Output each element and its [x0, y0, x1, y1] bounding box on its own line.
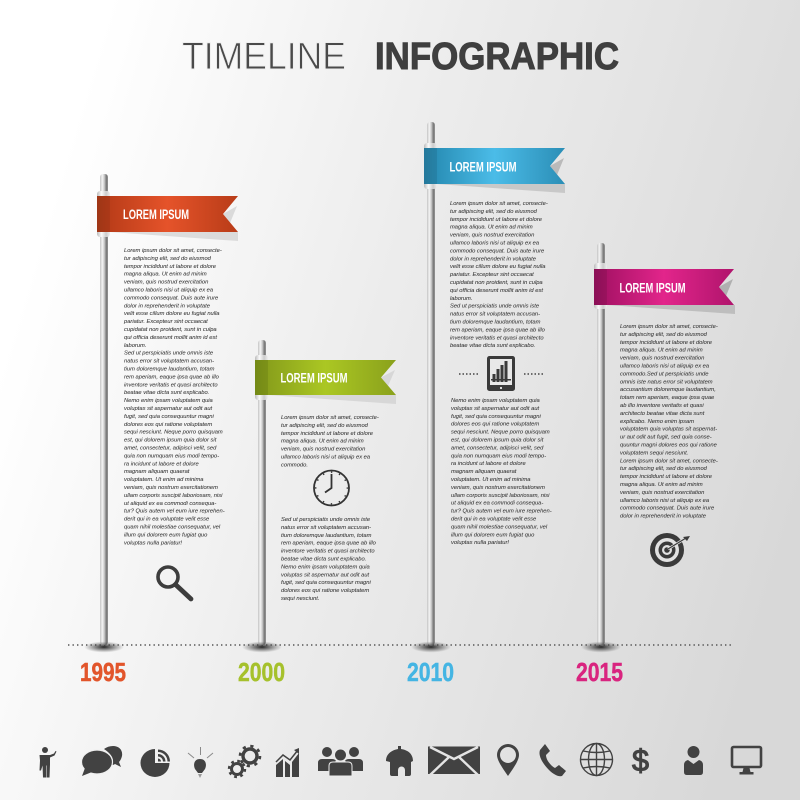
- text block 2010 part one: qui officia deserunt mollit anim id est: [450, 288, 543, 294]
- text block 2000 part two: beatae vitae dicta sunt explicabo.: [281, 556, 366, 562]
- icon: user: [684, 746, 703, 775]
- text block 1995: magnam aliquam quaerat: [124, 469, 190, 475]
- icon: light bulb: [188, 747, 213, 778]
- text block 2010 part two: quam nihil molestiae consequatur, vel: [451, 524, 548, 530]
- panel: 2010: [407, 122, 565, 687]
- text block 2010 part two: sequi nesciunt. Neque porro quisquam: [451, 430, 550, 436]
- icon: presenter: [40, 747, 56, 778]
- flag 1995: [97, 196, 238, 241]
- pole 2015: [581, 243, 621, 652]
- text block 2000 part two: inventore veritatis et quasi architecto: [281, 549, 375, 555]
- icon: speech bubbles: [82, 746, 122, 776]
- text block 1995: ullam corporis suscipit laboriosam, nisi: [124, 493, 223, 499]
- text block 2010 part one: velit esse cillum dolore eu fugiat nulla: [450, 264, 546, 270]
- text block 2000 part one: tur adipiscing elit, sed do eiusmod: [281, 423, 369, 429]
- pole 2010: [411, 122, 451, 652]
- text block 2010 part one: tium doloremque laudantium, totam: [450, 320, 541, 326]
- icon: pie with signal: [140, 749, 170, 777]
- flag 2015: [594, 269, 735, 314]
- icon: magnifier: [158, 567, 191, 599]
- text block 2010 part one: Sed ut perspiciatis unde omnis iste: [450, 304, 539, 310]
- icon: telephone: [539, 744, 566, 776]
- panel: 2000: [238, 340, 396, 687]
- text block 2015: tempor incididunt ut labore et dolore: [620, 474, 712, 480]
- icon: envelope: [428, 746, 480, 776]
- text block 2010 part two: voluptatem. Ut enim ad minima: [451, 477, 531, 483]
- text block 1995: velit esse cillum dolore eu fugiat nulla: [124, 311, 220, 317]
- text block 2015: commodo.Sed ut perspiciatis unde: [620, 371, 708, 377]
- flag 2000: LOREM IPSUM: [280, 370, 348, 386]
- text block 1995: quam nihil molestiae consequatur, vel: [124, 524, 221, 530]
- text block 2015: architecto beatae vitae dicta sunt: [620, 411, 705, 417]
- text block 2015: magna aliqua. Ut enim ad minim: [620, 482, 703, 488]
- year 2015: 2015: [576, 657, 623, 687]
- text block 1995: tur adipiscing elit, sed do eiusmod: [124, 256, 212, 262]
- text block 2010 part one: laborum.: [450, 296, 472, 302]
- text block 1995: laborum.: [124, 343, 146, 349]
- text block 1995: dolores eos qui ratione voluptatem: [124, 422, 212, 428]
- flag 2015: LOREM IPSUM: [620, 280, 686, 296]
- text block 2000 part two: Nemo enim ipsam voluptatem quia: [281, 564, 371, 570]
- text block 1995: tur? Quis autem vel eum iure reprehen-: [124, 509, 225, 515]
- text block 1995: ut aliquid ex ea commodi consequa-: [124, 501, 216, 507]
- text block 2010 part two: quia non numquam eius modi tempo-: [451, 453, 546, 459]
- text block 2010 part one: commodo consequat. Duis aute irure: [450, 248, 544, 254]
- text block 1995: commodo consequat. Duis aute irure: [124, 295, 218, 301]
- text block 2010 part one: rem aperiam, eaque ipsa quae ab illo: [450, 327, 546, 333]
- text block 2015: ab illo inventore veritatis et quasi: [620, 403, 704, 409]
- panel: 2015: [576, 243, 735, 687]
- text block 1995: Sed ut perspiciatis unde omnis iste: [124, 351, 213, 357]
- text block 2010 part one: Lorem ipsum dolor sit amet, consecte-: [450, 201, 548, 207]
- text block 2010 part two: Nemo enim ipsam voluptatem quia: [451, 398, 541, 404]
- text block 2010 part two: amet, consectetur, adipisci velit, sed: [451, 445, 544, 451]
- text block 2000 part one: Lorem ipsum dolor sit amet, consecte-: [281, 415, 379, 421]
- text block 2015: veniam, quis nostrud exercitation: [620, 490, 704, 496]
- text block 2015: veniam, quis nostrud exercitation: [620, 356, 704, 362]
- text block 2010 part two: ullam corporis suscipit laboriosam, nisi: [451, 493, 550, 499]
- text block 2000 part two: fugit, sed quia consequuntur magni: [281, 580, 371, 586]
- text block 1995: veniam, quis nostrum exercitationem: [124, 485, 218, 491]
- text block 2015: accusantium doloremque laudantium,: [620, 387, 716, 393]
- text block 1995: beatae vitae dicta sunt explicabo.: [124, 390, 209, 396]
- text block 1995: tempor incididunt ut labore et dolore: [124, 264, 216, 270]
- icon: target with arrow: [650, 533, 690, 567]
- text block 1995: magna aliqua. Ut enim ad minim: [124, 272, 207, 278]
- icon: tablet with bar chart: [459, 356, 543, 391]
- text block 2010 part one: magna aliqua. Ut enim ad minim: [450, 225, 533, 231]
- text block 2015: omnis iste natus error sit voluptatem: [620, 379, 713, 385]
- text block 1995: veniam, quis nostrud exercitation: [124, 280, 208, 286]
- text block 2010 part two: voluptas nulla pariatur!: [451, 540, 509, 546]
- title: [182, 36, 619, 78]
- text block 2015: ur aut odit aut fugit, sed quia conse-: [620, 435, 712, 441]
- text block 2000 part two: Sed ut perspiciatis unde omnis iste: [281, 517, 370, 523]
- text block 2015: dolor in reprehenderit in voluptate: [620, 514, 706, 520]
- text block 2015: quuntur magni dolores eos qui ratione: [620, 442, 717, 448]
- text block 2015: tur adipiscing elit, sed do eiusmod: [620, 466, 708, 472]
- icon row: [40, 743, 761, 778]
- icon: house: [386, 746, 413, 776]
- icon: clock: [314, 470, 349, 506]
- flag 1995: LOREM IPSUM: [123, 207, 189, 222]
- text block 2015: Lorem ipsum dolor sit amet, consecte-: [620, 324, 718, 330]
- year 2010: 2010: [407, 657, 454, 687]
- flag 2010: LOREM IPSUM: [450, 160, 516, 174]
- text block 1995: illum qui dolorem eum fugiat quo: [124, 532, 208, 538]
- text block 2015: magna aliqua. Ut enim ad minim: [620, 348, 703, 354]
- icon: gears: [229, 746, 260, 777]
- text block 1995: qui officia deserunt mollit anim id est: [124, 335, 217, 341]
- text block 1995: voluptatem. Ut enim ad minima: [124, 477, 204, 483]
- text block 2015: ullamco laboris nisi ut aliquip ex ea: [620, 498, 710, 504]
- text block 2010 part two: illum qui dolorem eum fugiat quo: [451, 532, 535, 538]
- text block 2010 part one: beatae vitae dicta sunt explicabo.: [450, 343, 535, 349]
- text block 2010 part two: ra incidunt ut labore et dolore: [451, 461, 526, 467]
- panel: 1995: [80, 174, 238, 687]
- text block 2015: voluptatem quia voluptas sit aspernat-: [620, 427, 717, 433]
- text block 2000 part two: tium doloremque laudantium, totam: [281, 533, 372, 539]
- text block 1995: fugit, sed quia consequuntur magni: [124, 414, 214, 420]
- year 1995: 1995: [80, 657, 126, 687]
- text block 2010 part two: dolores eos qui ratione voluptatem: [451, 422, 539, 428]
- text block 1995: natus error sit voluptatem accusan-: [124, 359, 214, 365]
- text block 1995: pariatur. Excepteur sint occaecat: [123, 319, 208, 325]
- pole 1995: [84, 174, 124, 652]
- text block 2015: tur adipiscing elit, sed do eiusmod: [620, 332, 708, 338]
- text block 2000 part two: voluptas sit aspernatur aut odit aut: [281, 572, 370, 578]
- text block 2010 part one: dolor in reprehenderit in voluptate: [450, 256, 536, 262]
- text block 2015: Lorem ipsum dolor sit amet, consecte-: [620, 458, 718, 464]
- text block 2010 part two: voluptas sit aspernatur aut odit aut: [451, 406, 540, 412]
- title: INFOGRAPHIC: [375, 36, 619, 78]
- text block 2010 part one: cupidatat non proident, sunt in culpa: [450, 280, 543, 286]
- text block 2000 part one: tempor incididunt ut labore et dolore: [281, 431, 373, 437]
- text block 2010 part two: tur? Quis autem vel eum iure reprehen-: [451, 509, 552, 515]
- icon: group of people: [318, 747, 363, 776]
- text block 2015: explicabo. Nemo enim ipsam: [620, 419, 694, 425]
- text block 2010 part two: fugit, sed quia consequuntur magni: [451, 414, 541, 420]
- text block 2015: totam rem aperiam, eaque ipsa quae: [620, 395, 714, 401]
- text block 1995: amet, consectetur, adipisci velit, sed: [124, 446, 217, 452]
- text block 1995: Lorem ipsum dolor sit amet, consecte-: [124, 248, 222, 254]
- text block 1995: cupidatat non proident, sunt in culpa: [124, 327, 217, 333]
- text block 1995: est, qui dolorem ipsum quia dolor sit: [124, 438, 217, 444]
- year 2000: 2000: [238, 657, 285, 687]
- text block 2010 part one: inventore veritatis et quasi architecto: [450, 335, 544, 341]
- text icon: dollar sign: $: [632, 743, 649, 778]
- timeline dotted axis: [68, 644, 733, 646]
- icon: rising chart: [276, 748, 299, 777]
- text block 2015: voluptatem sequi nesciunt.: [620, 450, 688, 456]
- text block 1995: dolor in reprehenderit in voluptate: [124, 303, 210, 309]
- text block 2015: tempor incididunt ut labore et dolore: [620, 340, 712, 346]
- text block 2000 part one: commodo.: [281, 462, 308, 468]
- text block 2010 part one: tur adipiscing elit, sed do eiusmod: [450, 209, 538, 215]
- icon: monitor: [732, 747, 761, 774]
- icon: globe: [580, 744, 612, 776]
- text block 2000 part two: sequi nesciunt.: [281, 596, 319, 602]
- text block 2000 part one: ullamco laboris nisi ut aliquip ex ea: [281, 454, 371, 460]
- text block 1995: ra incidunt ut labore et dolore: [124, 461, 199, 467]
- text block 2010 part two: magnam aliquam quaerat: [451, 469, 517, 475]
- text block 2015: commodo consequat. Duis aute irure: [620, 506, 714, 512]
- text block 2015: ullamco laboris nisi ut aliquip ex ea: [620, 364, 710, 370]
- text block 2000 part one: magna aliqua. Ut enim ad minim: [281, 439, 364, 445]
- text block 2010 part one: veniam, quis nostrud exercitation: [450, 233, 534, 239]
- text block 1995: voluptas sit aspernatur aut odit aut: [124, 406, 213, 412]
- flag 2000: [255, 360, 396, 404]
- text block 2010 part one: tempor incididunt ut labore et dolore: [450, 217, 542, 223]
- text block 2010 part two: ut aliquid ex ea commodi consequa-: [451, 501, 543, 507]
- text block 1995: voluptas nulla pariatur!: [124, 540, 182, 546]
- text block 2000 part one: veniam, quis nostrud exercitation: [281, 447, 365, 453]
- text block 1995: rem aperiam, eaque ipsa quae ab illo: [124, 374, 220, 380]
- text block 2000 part two: rem aperiam, eaque ipsa quae ab illo: [281, 541, 377, 547]
- title: TIMELINE: [182, 36, 346, 78]
- text block 1995: ullamco laboris nisi ut aliquip ex ea: [124, 288, 214, 294]
- icon: map pin: [497, 744, 519, 776]
- text block 2010 part two: derit qui in ea voluptate velit esse: [451, 516, 536, 522]
- text block 2000 part two: natus error sit voluptatem accusan-: [281, 525, 371, 531]
- text block 2010 part one: pariatur. Excepteur sint occaecat: [449, 272, 534, 278]
- text block 2010 part two: veniam, quis nostrum exercitationem: [451, 485, 545, 491]
- text block 2010 part one: ullamco laboris nisi ut aliquip ex ea: [450, 240, 540, 246]
- pole 2000: [242, 340, 282, 652]
- text block 1995: tium doloremque laudantium, totam: [124, 366, 215, 372]
- text block 2000 part two: dolores eos qui ratione voluptatem: [281, 588, 369, 594]
- text block 1995: sequi nesciunt. Neque porro quisquam: [124, 430, 223, 436]
- text block 1995: inventore veritatis et quasi architecto: [124, 382, 218, 388]
- text block 2010 part two: est, qui dolorem ipsum quia dolor sit: [451, 438, 544, 444]
- flag 2010: [424, 148, 565, 193]
- text block 1995: Nemo enim ipsam voluptatem quia: [124, 398, 214, 404]
- text block 2010 part one: natus error sit voluptatem accusan-: [450, 312, 540, 318]
- text block 1995: quia non numquam eius modi tempo-: [124, 453, 219, 459]
- text block 1995: derit qui in ea voluptate velit esse: [124, 517, 209, 523]
